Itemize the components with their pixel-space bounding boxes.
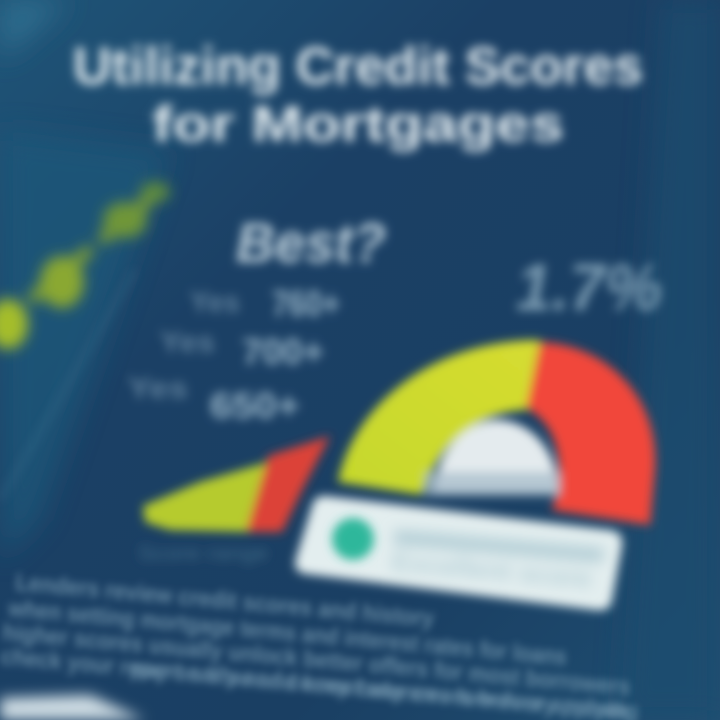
text block: score rows: 700+ [242, 331, 324, 372]
text block: score rows [128, 283, 340, 426]
chart: small gauge [143, 436, 330, 532]
callout text [391, 530, 604, 594]
title: Utilizing Credit Scores [73, 37, 643, 96]
heading: rates: Best? [236, 211, 386, 274]
figure: rate: 1.7% [516, 250, 662, 324]
text block: score rows: Yes [128, 372, 188, 405]
callout text: Excellent score [391, 546, 593, 593]
icon: green upward trend arrow [0, 182, 170, 349]
text block: paragraph: Lenders review credit scores and history [14, 569, 436, 633]
small caption: Score range [138, 543, 268, 565]
text block: score rows: 760+ [272, 283, 340, 324]
decorative diagonal line [0, 270, 135, 500]
icon: green check [332, 518, 374, 560]
text block: paragraph: higher scores usually unlock better offers for most borrowers [1, 619, 631, 701]
callout: score card [295, 496, 622, 610]
light corner shape [0, 695, 145, 720]
text block: score rows: Yes [160, 326, 215, 359]
chart: large gauge [338, 340, 655, 525]
text block: paragraph [0, 569, 639, 720]
title: for Mortgages [152, 96, 564, 152]
text block: score rows: Yes [190, 286, 240, 319]
title [73, 37, 643, 152]
text block: paragraph: when setting mortgage terms and interest rates for loans [7, 595, 568, 671]
text block: score rows: 650+ [210, 385, 300, 426]
